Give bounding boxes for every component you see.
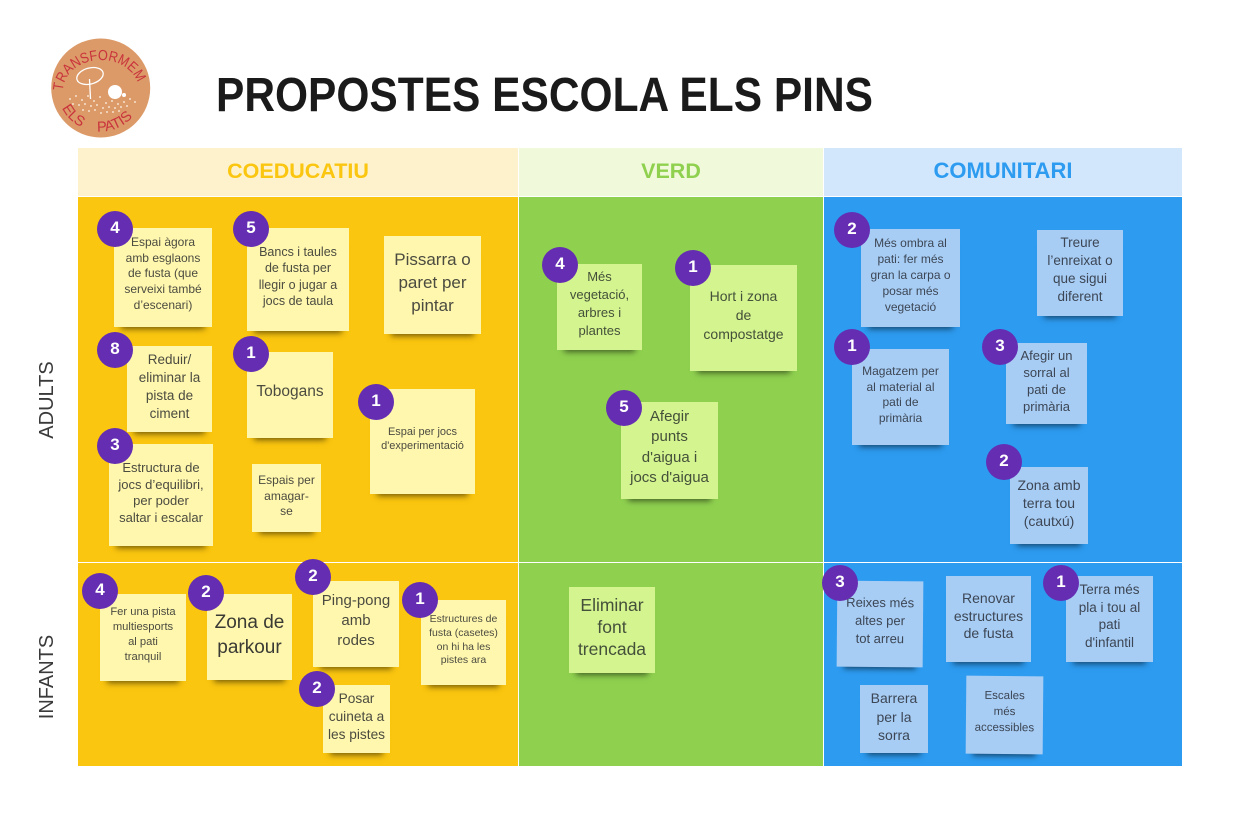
sticky note: Zona de parkour: parkour (217, 636, 282, 658)
badge: 4 (542, 247, 578, 283)
sticky note: Escales més accessibles: més (994, 706, 1015, 718)
sticky note: Més vegetació (557, 264, 642, 350)
sticky note: Espai àgora: d’escenari) (134, 298, 192, 312)
badge: 2: 2 (308, 566, 318, 585)
sticky note: Magatzem: primària (879, 410, 922, 424)
sticky note: Eliminar font trencada: trencada (578, 639, 646, 659)
sticky note: Magatzem (852, 349, 949, 445)
sticky note: Més vegetació: arbres i (578, 305, 621, 320)
sticky note: Pista multiesports: tranquil (125, 650, 161, 662)
sticky note: Pissarra: paret per (398, 272, 467, 292)
heading: Coeducatiu: COEDUCATIU (227, 159, 369, 183)
badge: 1: 1 (415, 589, 425, 608)
sticky note: Més ombra (861, 229, 960, 327)
badge: 4: 4 (555, 254, 565, 273)
badge: 4: 4 (110, 218, 120, 237)
badge: 2: 2 (201, 582, 211, 601)
sticky note: Més vegetació: Més (587, 269, 612, 284)
sticky note: Renovar estructures: de fusta (964, 625, 1013, 641)
sticky note: Afegir un sorral (1006, 343, 1087, 424)
sticky note: Espais per amagar-se: Espais per (258, 473, 315, 487)
badge: 3: 3 (835, 572, 845, 591)
heading: Comunitari (824, 148, 1182, 196)
sticky note: Espai per jocs (370, 389, 475, 494)
sticky note: Pissarra (384, 236, 481, 334)
sticky note: Hort: Hort i zona (710, 288, 777, 304)
panel: coeducatiu adults (78, 197, 518, 562)
badge: 2: 2 (847, 219, 857, 238)
sticky note: Afegir punts d'aigua: jocs d'aigua (630, 469, 709, 486)
sticky note: Escales més accessibles: accessibles (975, 722, 1034, 734)
sticky note: Barrera per la sorra (860, 685, 928, 753)
sticky note: Més ombra: gran la carpa o (870, 268, 951, 282)
sticky note: Estructura (109, 444, 213, 546)
badge: 1 (358, 384, 394, 420)
sticky note: Estructures de fusta (421, 600, 506, 685)
sticky note: Més ombra: posar més (882, 284, 939, 298)
logo: Transformem els patis: TRANSFORMEM (52, 50, 146, 90)
sticky note: Estructures de fusta: on hi ha les (437, 641, 490, 653)
heading: Coeducatiu (78, 148, 518, 196)
heading: Verd (519, 148, 823, 196)
sticky note: Hort: compostatge (703, 326, 784, 342)
sticky note: Espai per jocs: Espai per jocs (388, 426, 457, 438)
panel: verd adults (519, 197, 823, 562)
sticky note: Bancs i taules (247, 228, 349, 331)
sticky note: Afegir punts d'aigua: d'aigua i (642, 449, 697, 466)
badge: 3 (97, 428, 133, 464)
sticky note: Estructura: saltar i escalar (119, 510, 203, 524)
sticky note: Espai àgora: de fusta (que (128, 266, 198, 280)
badge: 1: 1 (688, 257, 698, 276)
sticky note: Ping-pong (313, 581, 399, 667)
sticky note: Afegir un sorral: sorral al (1023, 364, 1070, 380)
sticky note: Hort: de (736, 306, 751, 322)
sticky note: Terra més pla: pla i tou al (1079, 600, 1140, 615)
sticky note: Posar cuineta: Posar (339, 691, 374, 706)
sticky note: Afegir punts d'aigua (621, 402, 718, 499)
sticky note: Treure enreixat: diferent (1057, 289, 1103, 304)
badge: 1 (1043, 565, 1079, 601)
sticky note: Pissarra: pintar (411, 296, 454, 314)
badge: 5: 5 (619, 397, 629, 416)
sticky note: Pista multiesports (100, 594, 186, 681)
badge: 2 (834, 212, 870, 248)
badge: 5: 5 (246, 218, 256, 237)
sticky note: Treure enreixat: l’enreixat o (1047, 253, 1113, 268)
sticky note: Magatzem: Magatzem per (862, 364, 939, 378)
badge: 2 (986, 444, 1022, 480)
sticky note: Estructura: per poder (133, 493, 189, 508)
sticky note: Reduir: pista de (146, 388, 193, 403)
sticky note: Barrera per la sorra: per la (876, 708, 912, 724)
sticky note: Bancs i taules: llegir o jugar a (259, 278, 337, 292)
sticky note: Ping-pong: amb (341, 612, 371, 629)
sticky note: Estructura: Estructura de (122, 460, 200, 475)
sticky note: Ping-pong: Ping-pong (322, 592, 390, 609)
badge: 2 (299, 671, 335, 707)
sticky note: Estructures de fusta: Estructures de (430, 613, 497, 625)
sticky note: Afegir un sorral: pati de (1027, 382, 1066, 396)
sticky note: Reixes més altes: tot arreu (856, 631, 904, 646)
sticky note: Tobogans (247, 352, 333, 438)
sticky note: Tobogans: Tobogans (256, 383, 324, 400)
sticky note: Barrera per la sorra: Barrera (871, 690, 917, 706)
badge: 2: 2 (312, 678, 322, 697)
sticky note: Terra més pla: d'infantil (1085, 635, 1134, 650)
sticky note: Bancs i taules: Bancs i taules (259, 245, 337, 259)
sticky note: Estructura: jocs d’equilibri, (118, 476, 204, 492)
badge: 2 (295, 559, 331, 595)
badge: 4 (82, 573, 118, 609)
sticky note: Reixes més altes: Reixes més (846, 595, 914, 610)
badge: 3: 3 (995, 336, 1005, 355)
badge: 5 (606, 390, 642, 426)
badge: 1: 1 (847, 336, 857, 355)
badge: 1 (402, 582, 438, 618)
sticky note: Pista multiesports: al pati (128, 636, 158, 648)
sticky note: Renovar estructures: estructures (954, 608, 1023, 624)
badge: 1 (233, 336, 269, 372)
row label: Adults: ADULTS (36, 361, 58, 439)
sticky note: Eliminar font trencada: font (597, 617, 627, 637)
sticky note: Reixes més altes (837, 581, 923, 667)
sticky note: Més ombra: vegetació (885, 300, 936, 314)
sticky note: Eliminar font trencada (569, 587, 655, 673)
sticky note: Renovar estructures: Renovar (962, 590, 1015, 606)
sticky note: Estructures de fusta: fusta (casetes) (429, 627, 498, 639)
sticky note: Posar cuineta: cuineta a (329, 709, 384, 724)
sticky note: Més vegetació: vegetació, (570, 287, 629, 302)
sticky note: Estructures de fusta: pistes ara (441, 654, 486, 666)
sticky note: Renovar estructures (946, 576, 1031, 662)
sticky note: Eliminar font trencada: Eliminar (580, 595, 644, 615)
panel: verd infants (519, 563, 823, 766)
sticky note: Terra més pla (1066, 576, 1153, 662)
panel: comunitari infants (824, 563, 1182, 766)
sticky note: Magatzem: al material al (866, 380, 935, 394)
badge: 3 (982, 329, 1018, 365)
row label: Infants: INFANTS (36, 635, 58, 719)
sticky note: Afegir punts d'aigua: punts (651, 428, 688, 445)
sticky note: Zona amb terra tou: (cautxú) (1024, 513, 1074, 529)
sticky note: Espai àgora: serveixi també (124, 282, 202, 296)
sticky note: Zona de parkour (207, 594, 292, 680)
badge: 1: 1 (371, 391, 381, 410)
badge: 4 (97, 211, 133, 247)
sticky note: Bancs i taules: de fusta per (265, 261, 331, 275)
logo: Transformem els patis (51, 38, 150, 138)
sticky note: Terra més pla: pati (1099, 617, 1120, 632)
sticky note: Posar cuineta: les pistes (328, 727, 385, 742)
badge: 4: 4 (95, 580, 105, 599)
sticky note: Reduir: ciment (150, 406, 189, 421)
badge: 5 (233, 211, 269, 247)
sticky note: Pista multiesports: multiesports (113, 620, 173, 632)
sticky note: Espai àgora: Espai àgora (131, 235, 195, 249)
sticky note: Magatzem: pati de (882, 395, 919, 409)
sticky note: Més ombra: pati: fer més (877, 252, 944, 266)
sticky note: Zona amb terra tou: terra tou (1023, 495, 1075, 511)
sticky note: Espai per jocs: d'experimentació (381, 440, 464, 452)
sticky note: Treure enreixat: que sigui (1053, 271, 1107, 286)
sticky note: Espai àgora (114, 228, 212, 327)
sticky note: Treure enreixat: Treure (1060, 235, 1100, 250)
sticky note: Terra més pla: Terra més (1079, 582, 1140, 597)
sticky note: Més ombra: Més ombra al (874, 236, 947, 250)
badge: 8 (97, 332, 133, 368)
sticky note: Bancs i taules: jocs de taula (263, 294, 333, 308)
sticky note: Escales més accessibles: Escales (984, 690, 1025, 702)
panel: coeducatiu infants (78, 563, 518, 766)
sticky note: Espais per amagar-se (252, 464, 321, 532)
title: PROPOSTES ESCOLA ELS PINS (216, 69, 873, 122)
sticky note: Espai àgora: amb esglaons (126, 251, 200, 265)
sticky note: Escales més accessibles (966, 676, 1043, 754)
badge: 3 (822, 565, 858, 601)
sticky note: Més vegetació: plantes (579, 323, 620, 338)
panel: comunitari adults (824, 197, 1182, 562)
sticky note: Reduir: Reduir/ (148, 352, 191, 367)
sticky note: Espais per amagar-se: se (280, 504, 293, 518)
sticky note: Reduir (127, 346, 212, 432)
badge: 1 (834, 329, 870, 365)
sticky note: Pista multiesports: Fer una pista (110, 606, 176, 618)
sticky note: Afegir un sorral: Afegir un (1020, 348, 1073, 362)
heading: Comunitari: COMUNITARI (934, 158, 1072, 183)
badge: 1 (675, 250, 711, 286)
sticky note: Espais per amagar-se: amagar- (264, 488, 309, 502)
sticky note: Afegir punts d'aigua: Afegir (650, 408, 689, 425)
sticky note: Barrera per la sorra: sorra (878, 727, 910, 743)
logo: Transformem els patis: ELS (62, 104, 85, 126)
sticky note: Pissarra: Pissarra o (394, 250, 471, 268)
sticky note: Treure enreixat (1037, 230, 1123, 316)
badge: 1: 1 (246, 343, 256, 362)
sticky note: Hort (690, 265, 797, 371)
sticky note: Afegir un sorral: primària (1023, 398, 1070, 414)
badge: 2 (188, 575, 224, 611)
sticky note: Reixes més altes: altes per (855, 613, 905, 628)
sticky note: Reduir: eliminar la (139, 370, 200, 385)
logo: Transformem els patis: PATIS (98, 111, 132, 132)
sticky note: Zona de parkour: Zona de (215, 612, 284, 632)
sticky note: Ping-pong: rodes (337, 632, 375, 649)
badge: 8: 8 (110, 339, 120, 358)
heading: Verd: VERD (641, 159, 701, 183)
sticky note: Zona amb terra tou: Zona amb (1017, 477, 1081, 493)
badge: 2: 2 (999, 451, 1009, 470)
sticky note: Zona amb terra tou (1010, 467, 1088, 544)
badge: 3: 3 (110, 435, 120, 454)
badge: 1: 1 (1056, 572, 1066, 591)
sticky note: Posar cuineta (323, 685, 390, 753)
